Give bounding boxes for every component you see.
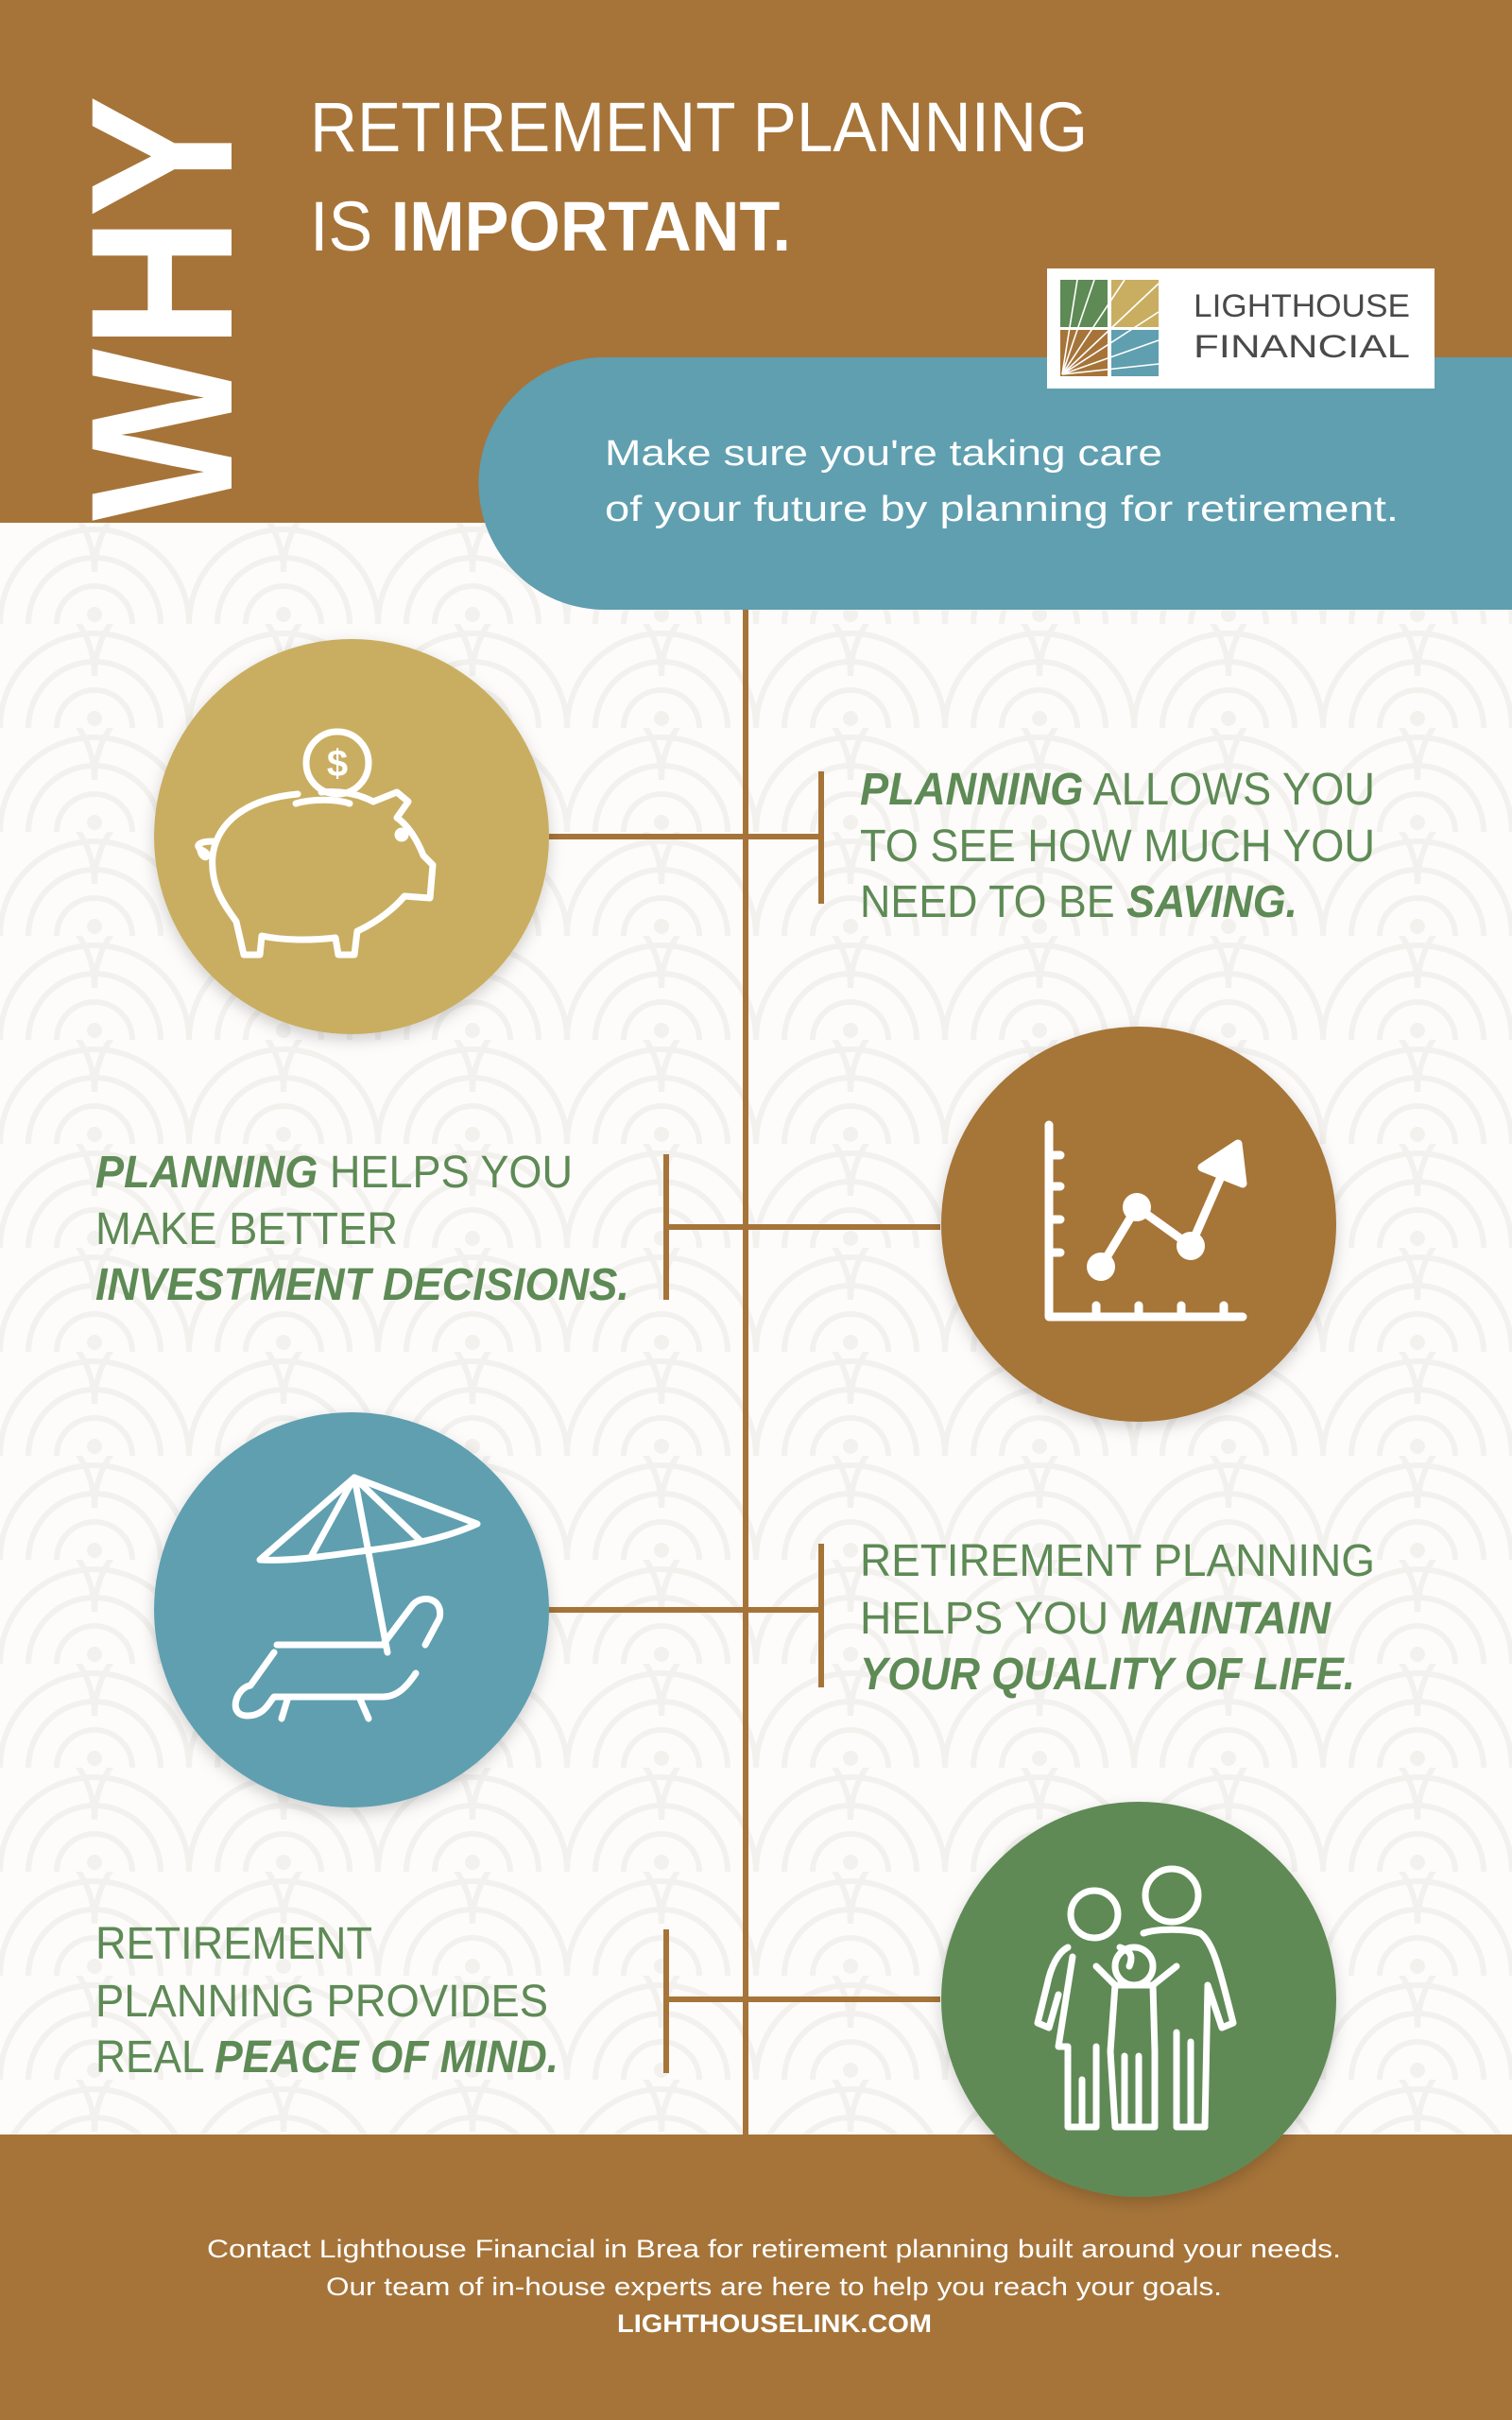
footer [0, 2135, 1512, 2420]
header band [0, 0, 1512, 523]
title [310, 88, 1088, 266]
text 4: RETIREMENT [95, 1919, 372, 1969]
subtitle pill [478, 357, 1512, 610]
text 2: MAKE BETTER [95, 1204, 398, 1254]
text 4 [95, 1919, 558, 2083]
footer: Contact Lighthouse Financial in Brea for retirement planning built around your needs. [207, 2235, 1341, 2263]
text 1: TO SEE HOW MUCH YOU [860, 821, 1375, 872]
text 2: PLANNING HELPS YOU [95, 1148, 573, 1198]
text 3: RETIREMENT PLANNING [860, 1536, 1375, 1586]
connectors [549, 771, 940, 2073]
subtitle pill: of your future by planning for retirement. [605, 490, 1399, 529]
text 3: HELPS YOU MAINTAIN [860, 1594, 1332, 1644]
logo [1047, 268, 1435, 389]
text 1: PLANNING ALLOWS YOU [860, 765, 1375, 815]
circle 1: piggy bank [154, 639, 549, 1034]
title: RETIREMENT PLANNING [310, 88, 1088, 166]
text 4: REAL PEACE OF MIND. [95, 2032, 558, 2083]
text 1 [860, 765, 1375, 927]
background pattern [0, 523, 1512, 2135]
text 2: INVESTMENT DECISIONS. [95, 1260, 629, 1310]
footer: LIGHTHOUSELINK.COM [617, 2309, 932, 2338]
circle 3: beach chair [154, 1412, 549, 1807]
text 1: NEED TO BE SAVING. [860, 877, 1297, 927]
footer: Our team of in-house experts are here to help you reach your goals. [326, 2273, 1222, 2301]
subtitle pill: Make sure you're taking care [605, 434, 1162, 474]
vertical word WHY: WHY [49, 95, 275, 521]
text 4: PLANNING PROVIDES [95, 1977, 548, 2027]
circle 1: piggy bank: $ [327, 743, 348, 785]
title: IS IMPORTANT. [310, 187, 791, 266]
text 3 [860, 1536, 1375, 1700]
circle 2: growth chart [941, 1027, 1336, 1422]
timeline line [743, 610, 748, 2135]
circle 4: family [941, 1802, 1336, 2197]
logo: LIGHTHOUSE [1194, 288, 1410, 324]
text 3: YOUR QUALITY OF LIFE. [860, 1650, 1355, 1700]
text 2 [95, 1148, 629, 1310]
logo: FINANCIAL [1194, 329, 1410, 365]
